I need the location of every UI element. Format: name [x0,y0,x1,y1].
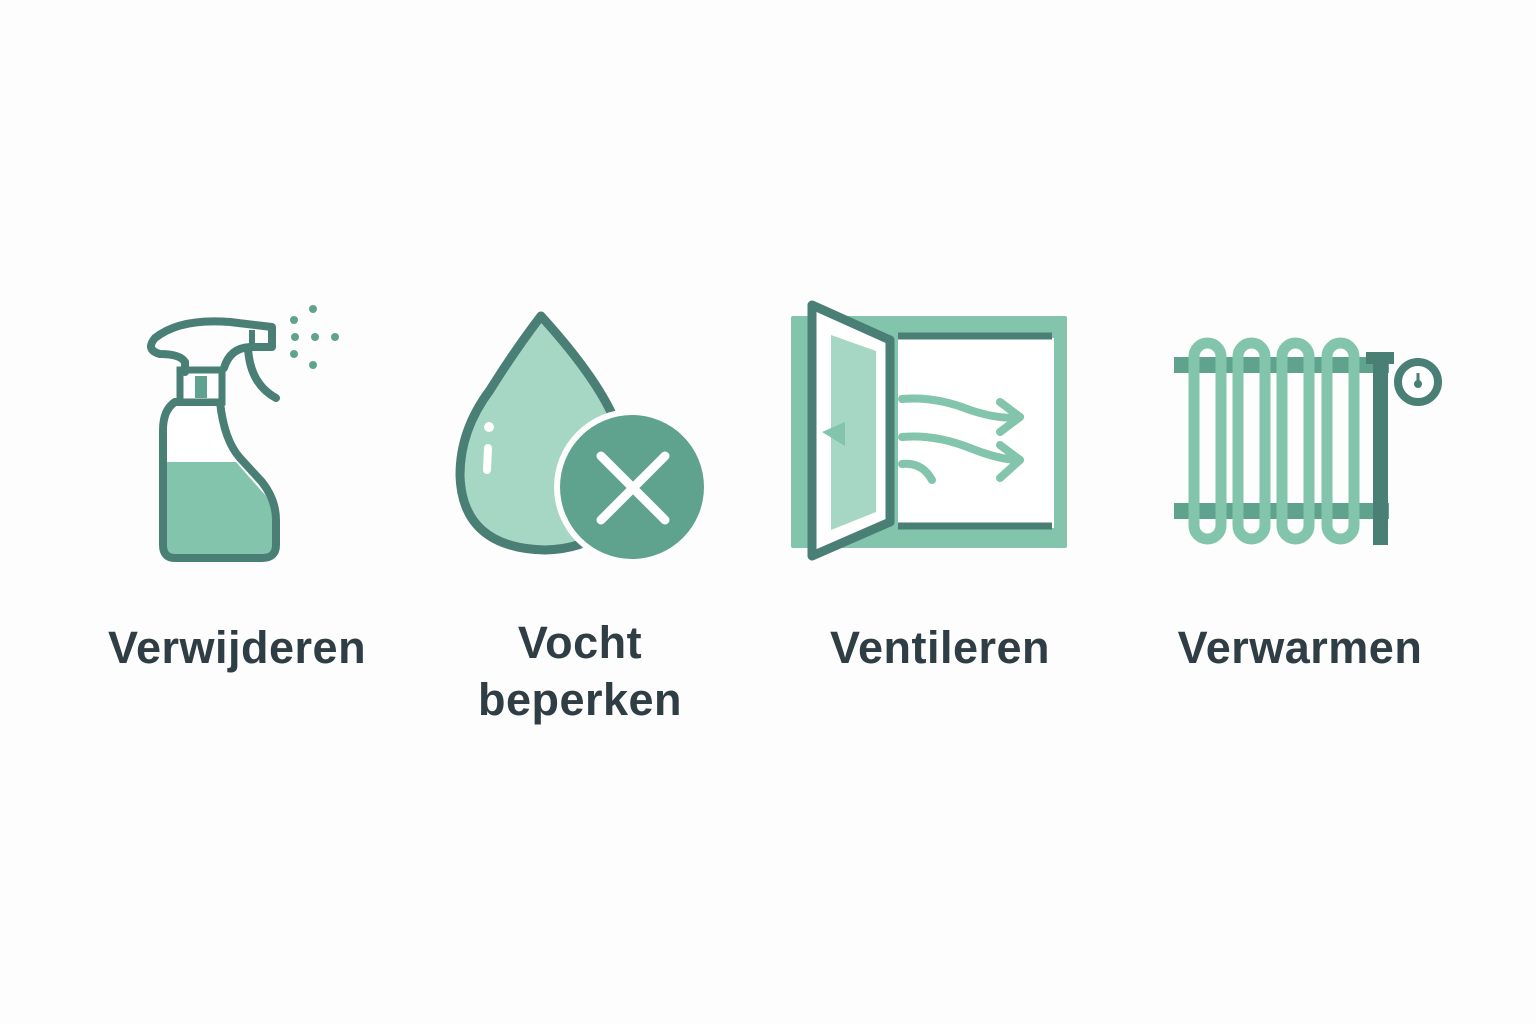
label: Verwijderen: Verwijderen [108,622,366,673]
icon: spray bottle [151,305,339,558]
icon: open window with air arrows [791,305,1067,556]
icon: water drop with X [460,316,710,565]
label: Vocht beperken: Vocht [518,617,642,668]
label: Vocht beperken [478,617,682,725]
label: Verwarmen: Verwarmen [1178,622,1422,673]
label: Vocht beperken: beperken [478,674,682,725]
label: Ventileren: Ventileren [830,622,1050,673]
icon: radiator [1174,343,1438,545]
